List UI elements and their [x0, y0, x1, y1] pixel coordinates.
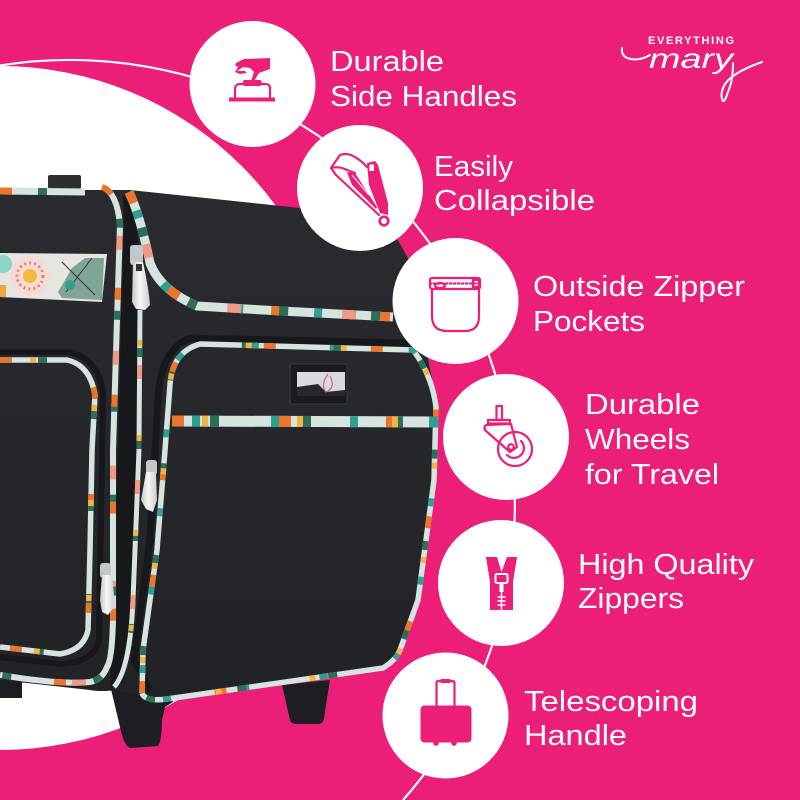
label: Zippers [578, 583, 684, 615]
label: Easily [434, 151, 514, 183]
label [524, 686, 698, 752]
icon: zipper pocket [430, 278, 480, 331]
connector arc linking feature circles [0, 60, 515, 800]
label: for Travel [585, 459, 719, 491]
brand badge on bag [290, 364, 347, 404]
label [533, 271, 745, 338]
feature 1: durable side handles [190, 21, 517, 147]
zipper pull 2 [141, 460, 157, 512]
circle 4 [443, 374, 569, 500]
label: Outside Zipper [533, 271, 745, 303]
floral trim: center seam right [114, 310, 140, 687]
floral trim: top edge [0, 191, 85, 192]
label: Handle [524, 720, 627, 752]
label: High Quality [578, 549, 755, 581]
logo: Everything Mary [622, 35, 762, 101]
zipper pull 3 [100, 563, 115, 615]
label [585, 389, 719, 491]
circle 1 [190, 21, 316, 147]
floral trim: flap [129, 192, 393, 317]
feature 3: outside zipper pockets [392, 238, 745, 364]
center zipper column [110, 195, 143, 690]
circle 2 [297, 125, 423, 251]
bag wheel feet [0, 680, 330, 748]
label [578, 549, 755, 615]
floral trim: front pocket band [172, 421, 437, 422]
icon: zipper [486, 557, 517, 610]
bag body [0, 190, 438, 701]
circle 6 [382, 652, 508, 778]
feature 2: easily collapsible [297, 125, 595, 251]
label: Durable [330, 46, 444, 78]
bag top grab tab [48, 175, 81, 189]
label: Collapsible [434, 185, 595, 217]
label: Telescoping [524, 686, 698, 718]
feature 6: telescoping handle [382, 652, 698, 778]
zipper pull 1 [130, 245, 150, 310]
product photo: rolling bag [0, 175, 438, 748]
feature 5: high quality zippers [438, 520, 755, 646]
label [330, 46, 517, 113]
floral trim: left pocket [0, 360, 95, 654]
circle 5 [438, 520, 564, 646]
feature 4: durable wheels for travel [443, 374, 719, 500]
icon: suitcase with handle [420, 679, 472, 746]
circle 3 [392, 238, 518, 364]
white backdrop circle [0, 66, 342, 750]
label: Durable [585, 389, 700, 421]
label: Side Handles [330, 81, 517, 113]
floral trim: front pocket [142, 344, 436, 700]
floral trim: center seam left [0, 187, 120, 683]
floral strap on left panel [0, 253, 107, 302]
left pocket zipper groove [0, 352, 103, 664]
front pocket zipper groove [134, 338, 410, 690]
icon: collapsed bag [331, 154, 388, 225]
icon: caster wheel [484, 406, 532, 466]
label [434, 151, 595, 217]
icon: hand lifting handle [229, 58, 275, 102]
label: Wheels [585, 424, 690, 456]
label: Pockets [533, 306, 645, 338]
logo: Everything Mary: mary [649, 43, 736, 74]
logo: Everything Mary: EVERYTHING [648, 35, 734, 47]
